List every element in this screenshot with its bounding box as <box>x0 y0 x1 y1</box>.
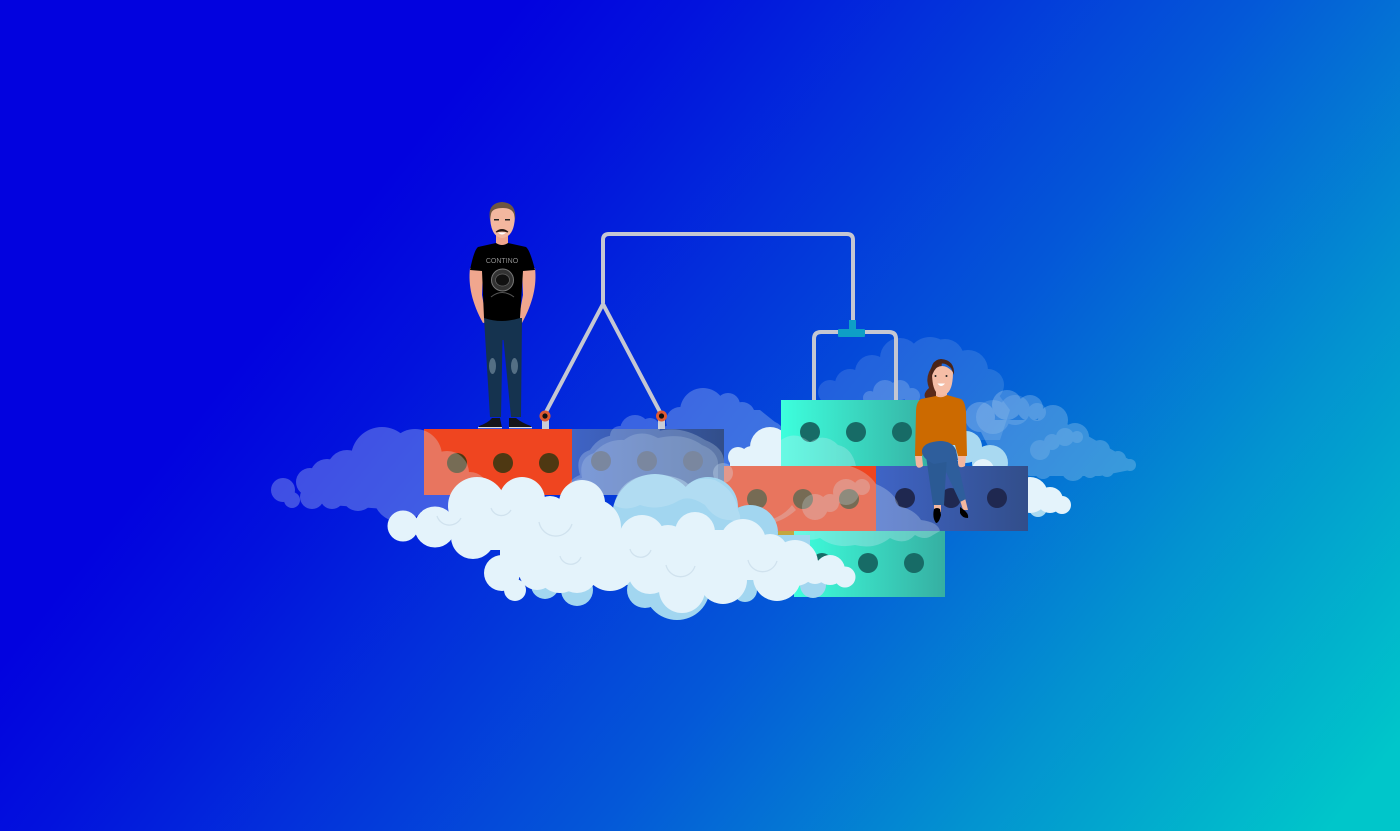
joint: left red bolt <box>540 410 550 429</box>
woman face <box>932 366 953 395</box>
block: red middle <box>724 466 876 531</box>
shirt brand text: CONTINO <box>486 258 519 265</box>
block: blue middle right <box>876 466 1028 531</box>
cloud: white behind right blocks <box>728 427 1071 517</box>
shirt astronaut graphic <box>491 269 514 297</box>
woman shoes <box>933 507 968 523</box>
woman hair back <box>925 362 942 399</box>
woman legs <box>922 441 966 505</box>
man t-shirt <box>470 243 535 321</box>
woman sweater <box>915 395 967 456</box>
cloud: light blue front <box>531 474 826 620</box>
woman ankles <box>934 498 968 512</box>
block: teal lower <box>794 531 945 597</box>
cloud: fold arcs <box>437 508 777 577</box>
man head <box>490 202 515 238</box>
man knee patches <box>489 358 518 374</box>
cloud: white front left <box>388 477 621 559</box>
woman hands <box>915 456 966 468</box>
pipe: upper frame and legs <box>546 234 896 412</box>
cloud wisp highlight <box>770 479 870 523</box>
man arms <box>470 234 535 323</box>
cloud: violet left overlay <box>271 427 488 522</box>
joint: right red bolt <box>656 410 667 429</box>
cloud on teal block <box>781 435 856 466</box>
woman face features <box>934 375 948 386</box>
block: red top left <box>424 429 572 495</box>
cloud: far right <box>965 390 1136 481</box>
block: blue top middle <box>572 429 724 495</box>
man shoes <box>478 418 532 428</box>
cloud: behind blue block <box>660 388 785 470</box>
block: gold sliver <box>778 531 796 543</box>
connector: teal T joint <box>838 320 865 337</box>
figure: man standing <box>470 202 535 428</box>
small overlap circle <box>713 463 733 483</box>
cloud: upper right behind blocks <box>818 337 1010 440</box>
cloud highlight <box>568 433 718 495</box>
cloud: white front main <box>484 512 856 613</box>
block: teal upper right <box>781 400 933 466</box>
cloud: inner light lobe between pipes <box>863 380 920 405</box>
cloud: light blue highlight <box>614 474 740 521</box>
cloud highlight <box>976 395 1083 460</box>
man jeans <box>484 318 522 417</box>
cloud: overlay on middle blocks <box>724 435 940 546</box>
woman neck <box>936 390 947 399</box>
figure: woman sitting <box>915 359 968 523</box>
woman hair top <box>931 359 954 379</box>
cloud: blue block overlay <box>568 415 733 495</box>
